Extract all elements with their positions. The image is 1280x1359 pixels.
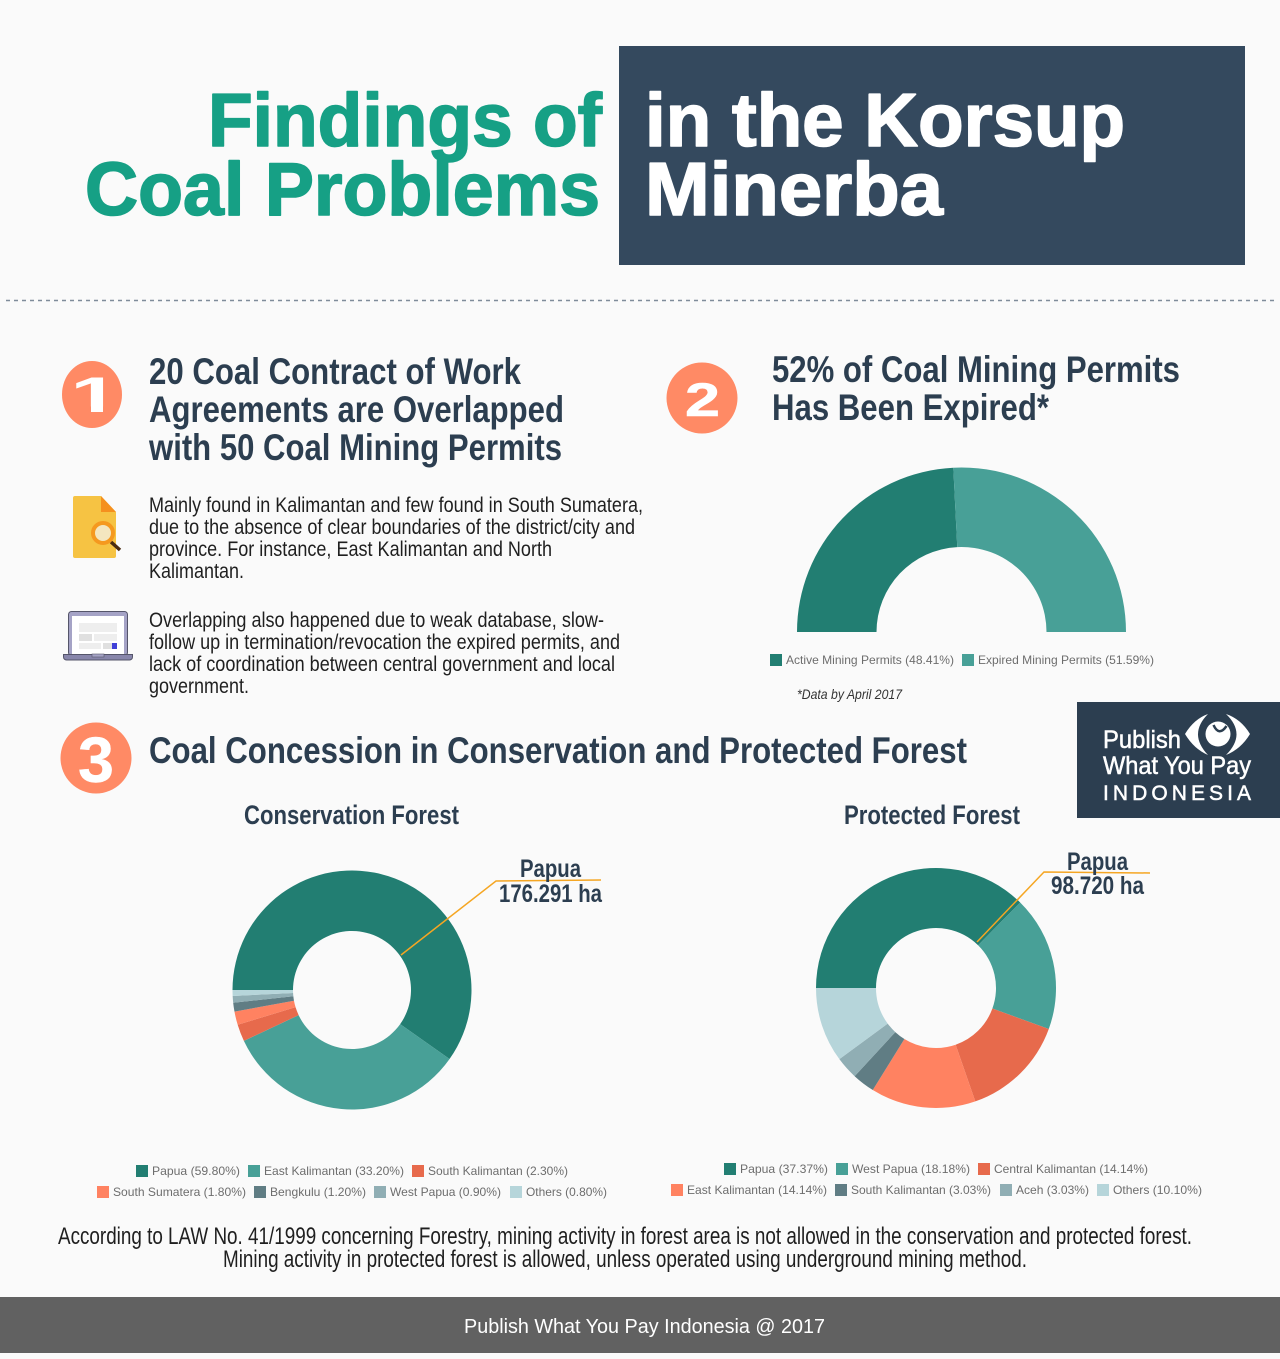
callout: Papua protected [977, 848, 1150, 942]
text: causes of overlaps [149, 609, 620, 698]
slice: Others [232, 990, 293, 996]
logo: Publish What You Pay Indonesia: INDONESIA [1103, 782, 1251, 805]
heading 2: Has Been Expired* [772, 387, 1050, 428]
title box [619, 46, 1245, 265]
slice: Papua [816, 868, 1020, 988]
title: white part: in the Korsup [645, 78, 1125, 162]
text: law note [58, 1223, 1192, 1273]
legend: conservation forest: East Kalimantan (33.20%) [264, 1164, 404, 1178]
callout: Papua conservation [401, 855, 603, 955]
panel: finding 3 [60, 722, 1202, 1199]
heading 1: with 50 Coal Mining Permits [148, 427, 562, 468]
number badge 1 [62, 361, 122, 428]
panel: finding 2 [666, 349, 1180, 702]
title [85, 46, 1245, 265]
heading 3: Coal Concession in Conservation and Protected Forest [149, 730, 967, 771]
text: causes of overlaps: lack of coordination between central government and local [149, 653, 615, 676]
logo: Publish What You Pay Indonesia: What You Pay [1103, 752, 1251, 780]
number badge 2 [666, 362, 738, 434]
heading 1: 20 Coal Contract of Work [149, 351, 521, 392]
slice: expired permits [953, 468, 1126, 632]
donut chart: conservation forest [232, 871, 472, 1109]
slice: Aceh [839, 1024, 895, 1076]
callout: Papua conservation: 176.291 ha [499, 880, 603, 908]
legend: protected forest: West Papua (18.18%) [852, 1162, 970, 1176]
text: location of overlaps: Mainly found in Kalimantan and few found in South Sumatera, [149, 494, 643, 517]
slice: South Sumatera [234, 1001, 296, 1025]
legend: conservation forest: Others (0.80%) [526, 1185, 607, 1199]
title: green part [85, 78, 603, 231]
slice: East Kalimantan [244, 1015, 450, 1109]
title: white part [645, 78, 1125, 231]
number badge 2: 2 [685, 373, 720, 426]
legend: conservation forest: South Sumatera (1.80%) [113, 1185, 246, 1199]
chart title: protected forest: Protected Forest [844, 800, 1020, 830]
slice: West Papua [233, 993, 293, 1003]
legend: protected forest: East Kalimantan (14.14%) [687, 1183, 827, 1197]
logo: Publish What You Pay Indonesia: Publish [1103, 726, 1181, 754]
heading 2 [772, 349, 1180, 428]
logo: Publish What You Pay Indonesia [1077, 702, 1280, 818]
slice: Bengkulu [233, 996, 294, 1012]
number badge 1: 1 [70, 367, 120, 423]
legend: conservation forest: West Papua (0.90%) [390, 1185, 501, 1199]
text: causes of overlaps: government. [149, 675, 249, 698]
title: green part: Coal Problems [85, 147, 600, 231]
slice: Central Kalimantan [956, 1008, 1049, 1101]
legend: protected forest: South Kalimantan (3.03%) [851, 1183, 991, 1197]
heading 2: 52% of Coal Mining Permits [772, 349, 1180, 390]
heading 1: Agreements are Overlapped [149, 389, 564, 430]
heading 1 [148, 351, 564, 468]
legend: conservation forest: Bengkulu (1.20%) [270, 1185, 366, 1199]
donut chart: protected forest [816, 868, 1056, 1108]
legend: protected forest: Aceh (3.03%) [1016, 1183, 1089, 1197]
icon: document with magnifier [73, 496, 120, 558]
legend: conservation forest: South Kalimantan (2.30%) [428, 1164, 568, 1178]
slice: Papua [232, 871, 472, 1059]
footnote: *Data by April 2017 [797, 686, 903, 702]
text: causes of overlaps: Overlapping also happened due to weak database, slow- [149, 609, 604, 632]
legend: protected forest: Others (10.10%) [1113, 1183, 1202, 1197]
slice: active permits [797, 468, 957, 632]
legend: protected forest [671, 1162, 1202, 1197]
footer: Publish What You Pay Indonesia @ 2017 [464, 1316, 825, 1338]
number badge 3 [60, 722, 132, 796]
callout: Papua conservation: Papua [520, 855, 582, 883]
number badge 3: 3 [78, 724, 114, 796]
panel: finding 1 [62, 351, 643, 698]
legend: conservation forest: Papua (59.80%) [152, 1164, 240, 1178]
legend: conservation forest [97, 1164, 607, 1199]
slice: South Kalimantan [855, 1032, 904, 1090]
legend: protected forest: Papua (37.37%) [740, 1162, 828, 1176]
legend: mining permits: Expired Mining Permits (51.59%) [978, 653, 1154, 667]
slice: South Kalimantan [238, 1007, 299, 1041]
text: location of overlaps: Kalimantan. [149, 560, 244, 583]
text: location of overlaps: province. For instance, East Kalimantan and North [149, 538, 552, 561]
chart title: conservation forest: Conservation Forest [244, 800, 459, 830]
icon: laptop [64, 612, 132, 660]
title: white part: Minerba [645, 147, 944, 231]
half donut chart: mining permits [797, 468, 1126, 632]
callout: Papua protected: Papua [1067, 848, 1129, 876]
legend: protected forest: Central Kalimantan (14.14%) [994, 1162, 1148, 1176]
legend: mining permits: Active Mining Permits (48.41%) [786, 653, 954, 667]
icon: eye [1185, 714, 1250, 755]
text: causes of overlaps: follow up in termination/revocation the expired permits, and [149, 631, 620, 654]
title: green part: Findings of [208, 78, 603, 162]
slice: Others [816, 988, 888, 1059]
slice: West Papua [978, 902, 1056, 1029]
slice: East Kalimantan [873, 1039, 975, 1108]
footer [0, 1297, 1280, 1353]
callout: Papua protected: 98.720 ha [1051, 872, 1145, 900]
legend: mining permits [770, 653, 1154, 667]
text: law note: Mining activity in protected forest is allowed, unless operated using underground mining method. [223, 1246, 1027, 1273]
text: location of overlaps: due to the absence of clear boundaries of the district/city and [149, 516, 635, 539]
text: location of overlaps [149, 494, 643, 583]
